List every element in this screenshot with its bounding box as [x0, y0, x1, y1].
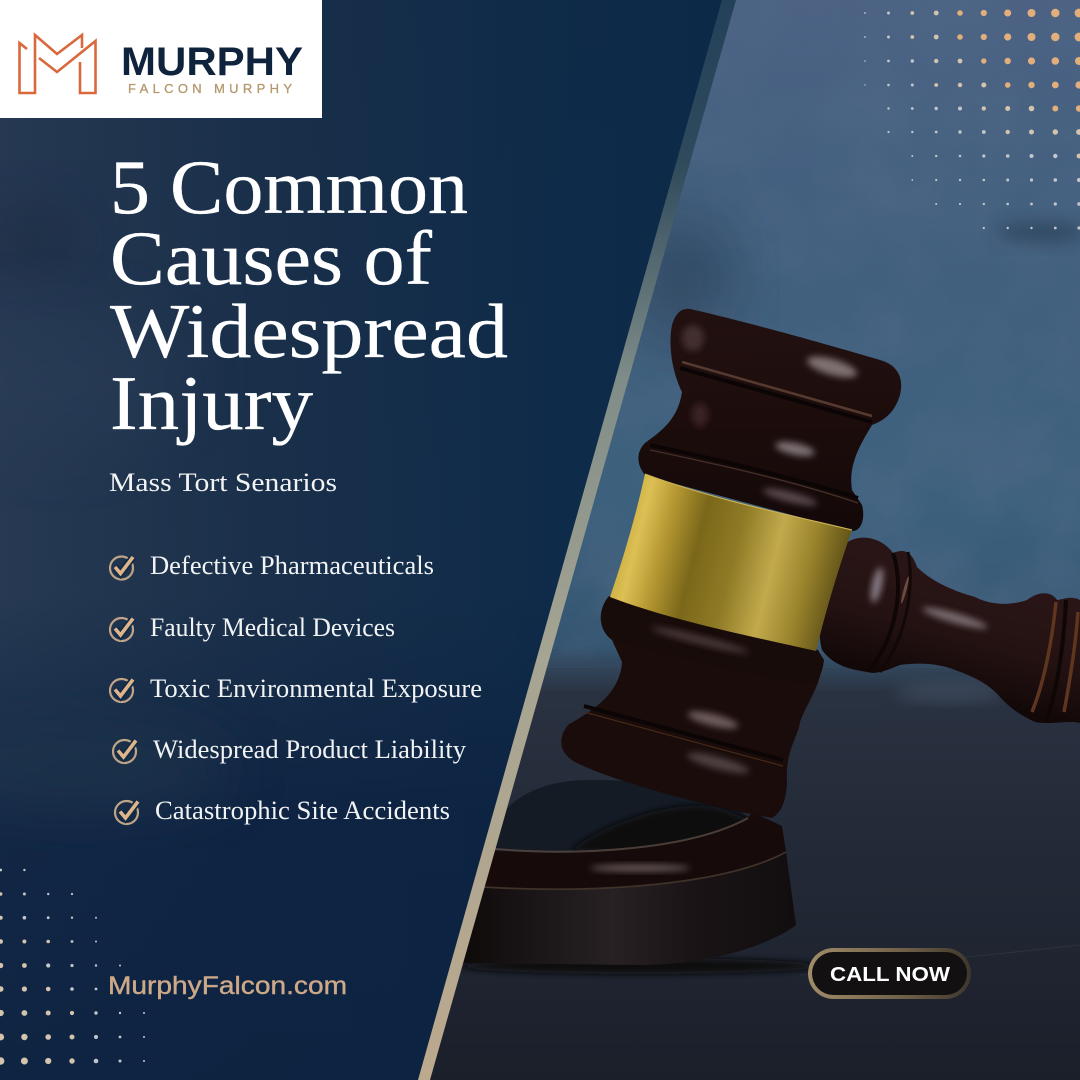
title: Widespread [110, 288, 508, 374]
background photo: wall and table [400, 0, 1080, 1080]
icon: M monogram [20, 35, 96, 93]
brass band [610, 474, 852, 651]
diagonal stripe divider [418, 0, 736, 1080]
website url: MurphyFalcon.com [108, 972, 347, 1000]
gavel handle [820, 538, 1080, 723]
lower collar [601, 596, 824, 684]
block upper ring [483, 812, 787, 892]
block top surface [496, 780, 748, 852]
title: Causes of [110, 215, 432, 301]
block shadow [460, 958, 820, 974]
halftone dots: bottom left [0, 869, 145, 1065]
list item: Defective Pharmaceuticals: Defective Pharmaceuticals [150, 551, 434, 580]
title [110, 144, 508, 446]
subtitle: Mass Tort Senarios [109, 468, 337, 497]
left navy panel [0, 0, 344, 806]
title: Injury [110, 360, 314, 446]
logo tagline: FALCON MURPHY [128, 81, 292, 96]
gavel sounding block [460, 780, 820, 974]
call now button: CALL NOW [830, 963, 951, 986]
lower neck and bottom ring [561, 640, 822, 818]
list item: Faulty Medical Devices: Faulty Medical Devices [150, 613, 395, 642]
title: 5 Common [110, 144, 468, 230]
block lower side [463, 852, 796, 965]
upper neck and cap [638, 309, 901, 531]
gavel head [561, 309, 901, 818]
call now button [808, 948, 971, 999]
logo wordmark: MURPHY [121, 40, 303, 84]
list item: Toxic Environmental Exposure: Toxic Environmental Exposure [150, 674, 482, 703]
logo panel [0, 0, 322, 118]
halftone dots: top right [864, 9, 1080, 230]
list item: Widespread Product Liability: Widespread Product Liability [153, 735, 466, 764]
list item: Catastrophic Site Accidents: Catastrophic Site Accidents [155, 796, 450, 825]
